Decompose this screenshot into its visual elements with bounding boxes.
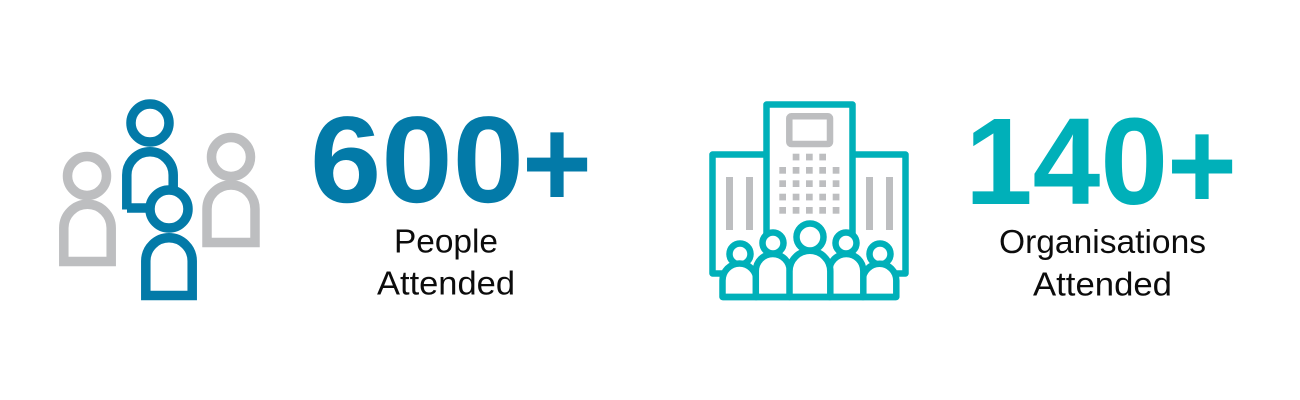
label: people attended: People: [394, 223, 498, 260]
label: people attended: [377, 223, 515, 301]
label: organisations attended: Attended: [1033, 266, 1172, 302]
window panel: [789, 116, 830, 144]
building outlines: [712, 104, 906, 274]
stat: 600+: +: [522, 92, 592, 234]
blue person front: [146, 190, 192, 296]
stat: 600+: 600: [310, 92, 524, 229]
icon: group of people: [64, 104, 255, 296]
label: organisations attended: [999, 223, 1206, 302]
window grid: [779, 154, 839, 214]
side window bars: [726, 177, 893, 230]
icon: office buildings with people: [712, 104, 906, 297]
stat: 140+: 140: [965, 94, 1168, 231]
crowd of five people: [722, 224, 896, 297]
blue person back: [127, 104, 173, 210]
stat: 140+: +: [1167, 94, 1237, 236]
label: organisations attended: Organisations: [999, 223, 1206, 260]
gray person left: [64, 156, 111, 262]
label: people attended: Attended: [377, 264, 515, 301]
gray person right: [207, 138, 255, 242]
